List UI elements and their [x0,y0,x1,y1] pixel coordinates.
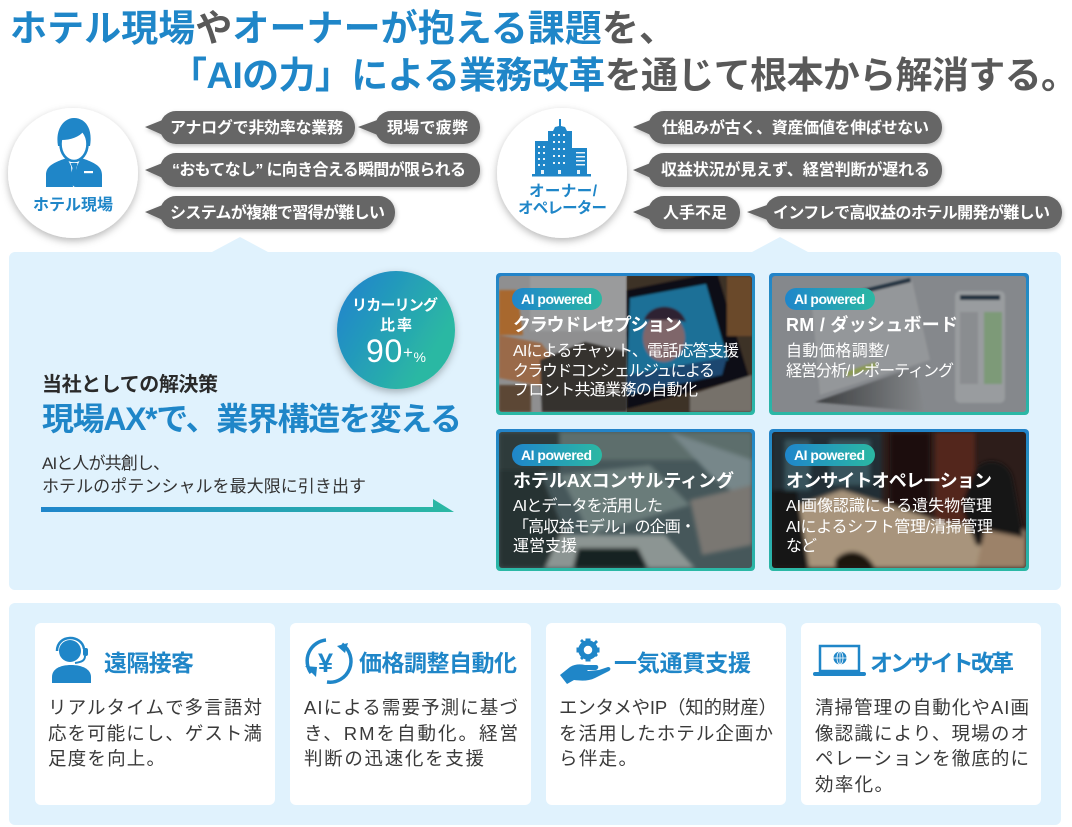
card text: 「高収益モデル」の企画・ [513,517,696,536]
icon: headset operator [52,638,91,683]
pill [785,444,875,466]
heading: change industry structure: 現場AX*で、業界構造を変える [42,401,462,437]
badge: recurring ratio: 90 [366,333,402,369]
text: ペレーションを徹底的に [815,748,1029,769]
callout: old structure [633,111,942,144]
text: 効率化。 [815,774,893,795]
text: ら伴走。 [559,748,637,769]
text [304,697,518,769]
text: 応を可能にし、ゲスト満 [48,723,262,744]
icon: hand with gear [560,639,610,684]
panel: remote service [35,623,275,805]
panel: RM dashboard card [769,273,1029,415]
panel: onsite operation card [769,429,1029,571]
card text [513,342,739,399]
text: を活用したホテル企画か [559,723,773,744]
card text: 経営分析/レポーティング [786,362,954,380]
callout: inflation: インフレで高収益のホテル開発が難しい [773,203,1050,222]
pill: AI powered [794,291,865,307]
badge: recurring ratio: リカーリング [352,296,438,314]
card text: AIによるチャット、電話応答支援 [513,342,739,360]
panel: auto pricing [290,623,531,805]
pill [512,288,602,310]
callout: inflation [747,196,1062,229]
text [48,697,262,769]
card text: など [786,537,817,555]
card text: フロント共通業務の自動化 [513,381,698,399]
callout: omotenashi [145,153,480,187]
badge: recurring ratio: 比率 [380,316,412,334]
heading: 遠隔接客 [104,650,194,676]
icon: buildings [532,119,591,176]
badge: recurring ratio: + [403,343,413,362]
callout: labor shortage [633,196,740,229]
callout: fatigue [358,111,480,144]
pill: AI powered [521,291,592,307]
card text [786,497,993,555]
card title: RM / ダッシュボード [786,314,958,335]
icon: laptop with globe [813,646,866,676]
card title: ホテルAXコンサルティング [513,470,734,491]
text: solution description: ホテルのポテンシャルを最大限に引き出す [42,477,366,496]
panel: hotel staff persona [8,108,138,238]
card text: 自動価格調整/ [786,342,890,360]
text: 足度を向上。 [48,748,165,769]
text: 判断の迅速化を支援 [304,748,484,769]
label: owner operator: オペレーター [518,199,607,217]
title: 「AIの力」による業務改革を通じて根本から解消する。 [170,55,1072,96]
photo: reception tablet [499,272,752,412]
text: き、RMを自動化。経営 [304,723,518,744]
panel: features background [9,603,1061,825]
icon: yen cycle [305,640,351,682]
callout: complex systems: システムが複雑で習得が難しい [170,203,385,222]
text: リアルタイムで多言語対 [48,697,262,718]
panel: onsite reform [801,623,1041,805]
arrow [41,499,454,512]
card text: AIによるシフト管理/清掃管理 [786,518,993,536]
pill [512,444,602,466]
callout: revenue visibility: 収益状況が見えず、経営判断が遅れる [661,160,930,179]
icon: yen cycle: ¥ [318,648,333,678]
photo: laptop and hands [499,432,752,568]
panel: solution background [9,237,1061,590]
card text: 運営支援 [513,537,577,555]
callout: complex systems [145,196,395,229]
label: hotel staff: ホテル現場 [33,196,113,214]
heading: our solution: 当社としての解決策 [42,373,218,396]
pill: AI powered [521,447,592,463]
panel: cloud reception card [496,272,755,415]
label: owner operator: オーナー/ [529,182,598,200]
badge: recurring ratio: % [414,349,426,365]
panel: owner persona [497,108,627,238]
callout: omotenashi: “おもてなし” に向き合える瞬間が限られる [172,160,466,179]
callout: labor shortage: 人手不足 [663,203,727,222]
callout: fatigue: 現場で疲弊 [387,119,468,137]
badge: recurring ratio [337,271,455,389]
card title: クラウドレセプション [513,315,682,335]
heading: オンサイト改革 [870,650,1014,676]
text [815,697,1029,795]
panel: end-to-end support [546,623,786,805]
callout: analog work [145,111,355,144]
card text [513,496,696,555]
photo: hotel room cleaning [772,432,1026,568]
heading: 一気通貫支援 [614,650,751,676]
text: 清掃管理の自動化やAI画 [815,697,1029,718]
text [559,697,777,769]
callout: analog work: アナログで非効率な業務 [170,118,343,137]
card text: AI画像認識による遺失物管理 [786,497,992,515]
title: ホテル現場やオーナーが抱える課題を、 [10,8,676,49]
text: AIによる需要予測に基づ [304,697,518,718]
title [10,8,1072,96]
card text: クラウドコンシェルジュによる [513,362,715,380]
text: solution description [42,454,366,496]
pill: AI powered [794,447,865,463]
callout: old structure: 仕組みが古く、資産価値を伸ばせない [662,118,929,137]
icon: staff person [46,118,102,187]
card text [786,342,954,380]
heading: 価格調整自動化 [359,650,517,676]
text: エンタメやIP（知的財産） [559,697,777,718]
panel: hotel AX consulting card [496,429,755,571]
card title: オンサイトオペレーション [786,471,992,491]
text: solution description: AIと人が共創し、 [42,454,170,473]
callout: revenue visibility [633,153,942,187]
pill [785,288,875,310]
photo: dashboard screens [772,276,1026,412]
label: owner operator [518,182,607,217]
card text: AIとデータを活用した [513,496,663,515]
text: 像認識により、現場のオ [815,723,1029,744]
